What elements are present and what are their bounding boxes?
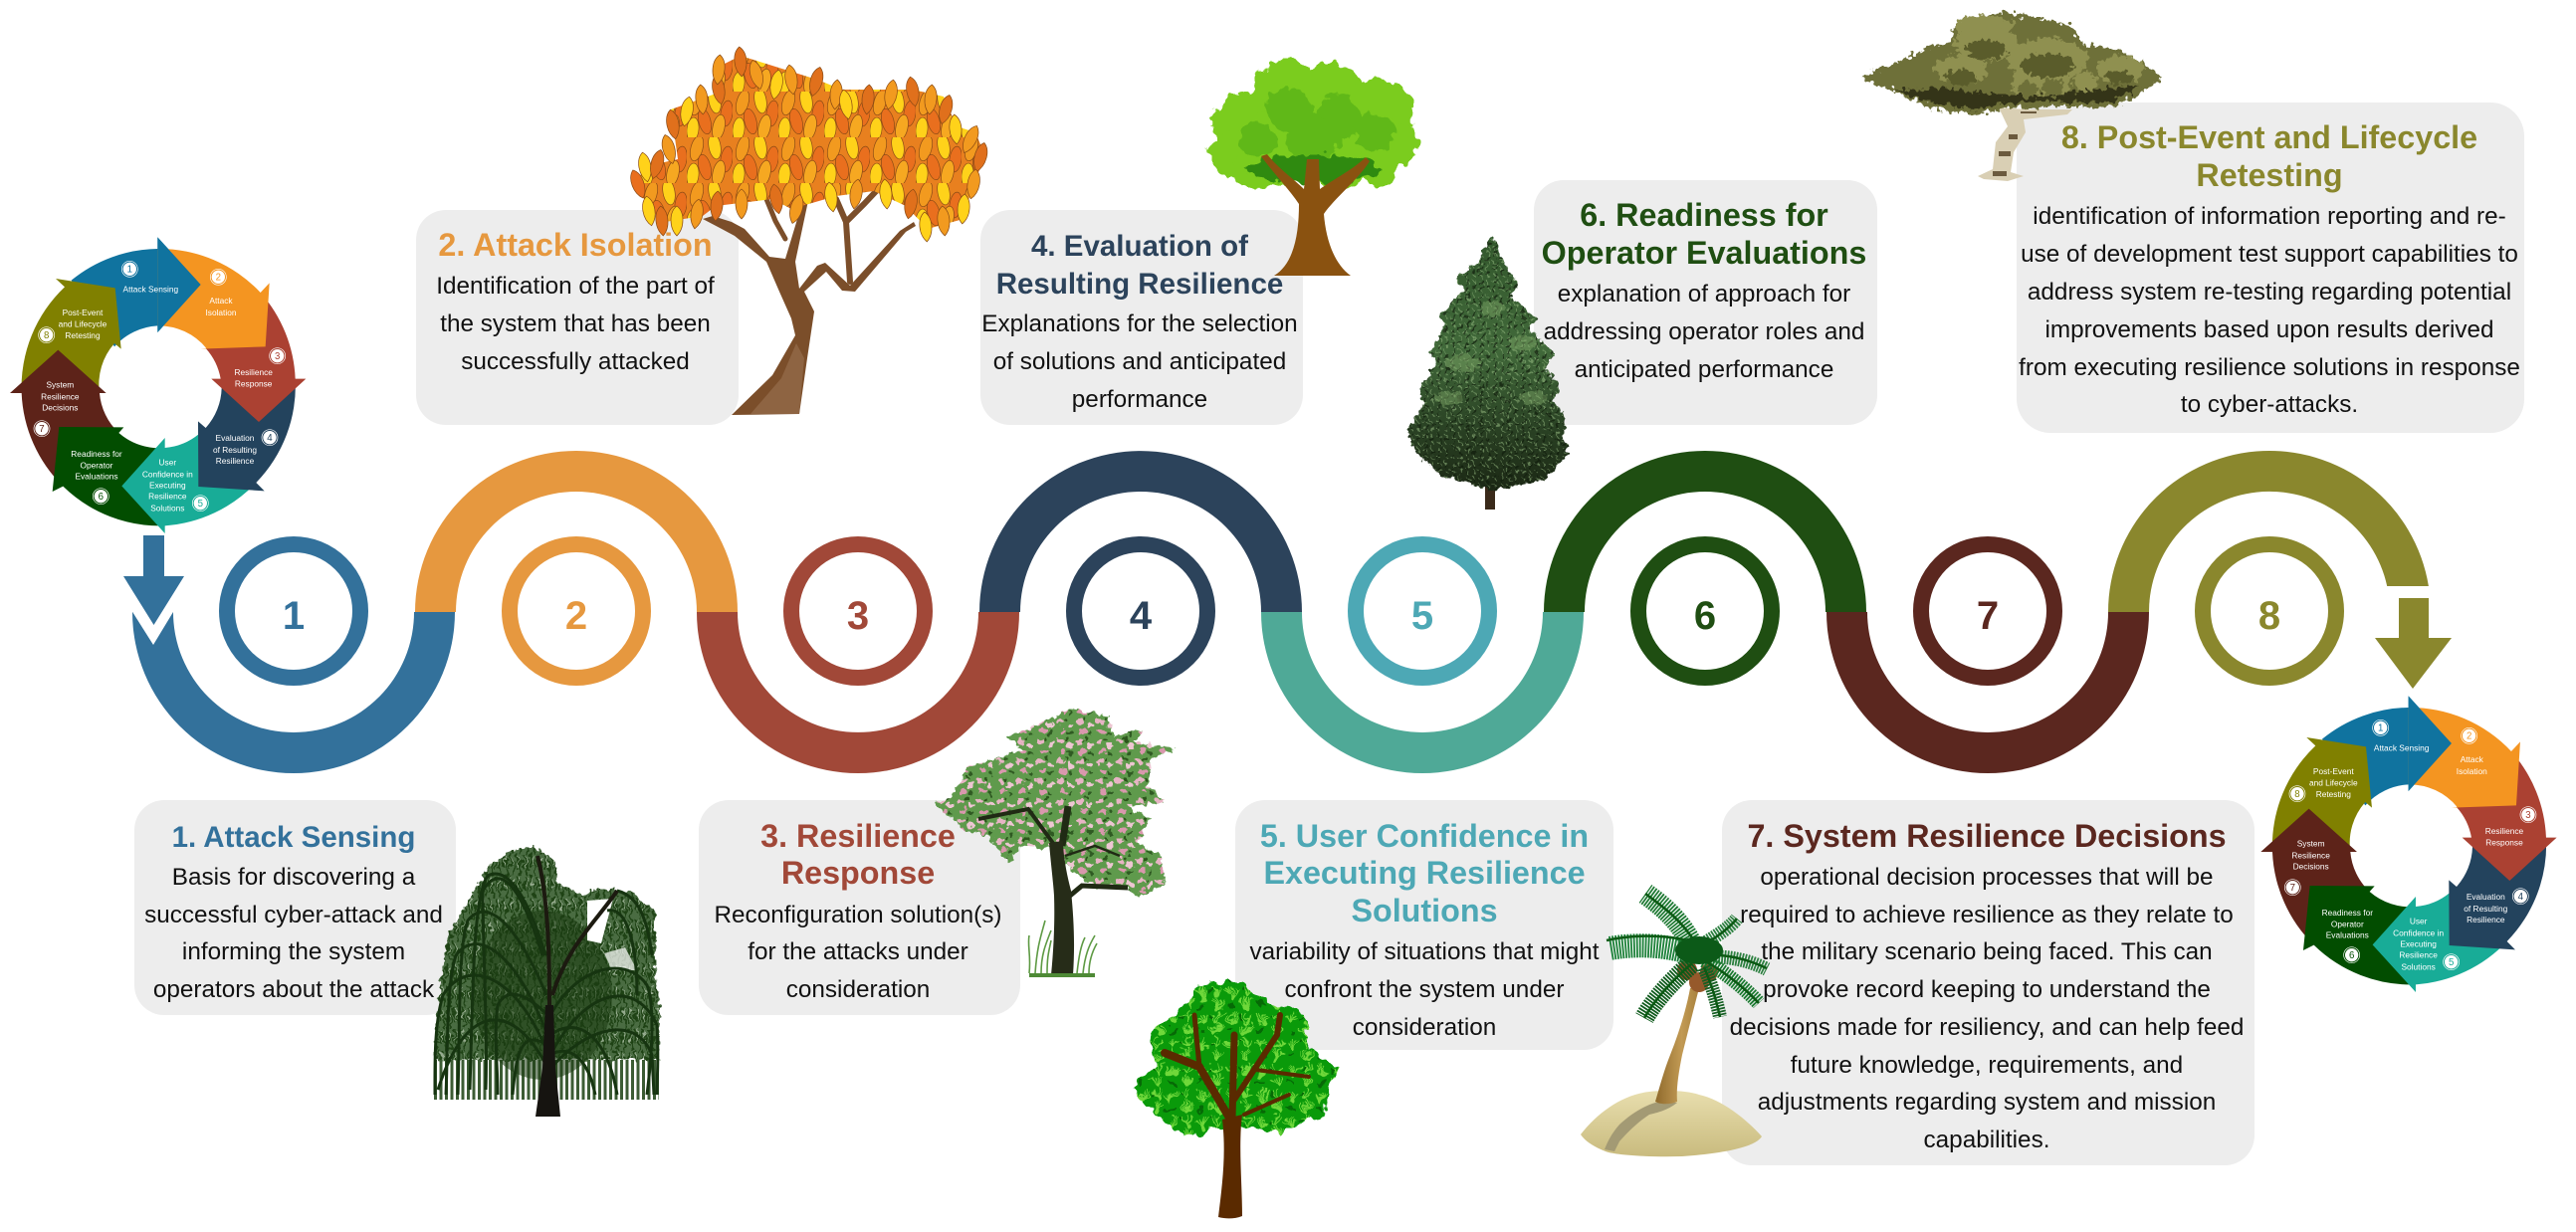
- arrow: entry into timeline: [123, 535, 184, 625]
- cycle labels: Decisions: [42, 402, 78, 412]
- text: system decisions description: capabilities.: [1924, 1127, 2049, 1153]
- icon: cherry blossom tree: [934, 709, 1177, 975]
- cycle labels: Isolation: [205, 308, 237, 317]
- text: system decisions description: adjustments regarding system and mission: [1758, 1089, 2216, 1116]
- cycle labels: Resilience: [148, 492, 187, 502]
- cycle labels: Confidence in: [2393, 927, 2444, 937]
- icon: acacia tree: [1861, 12, 2162, 181]
- cycle number badges: 4: [267, 433, 273, 444]
- panel: 1. Attack Sensing: [134, 800, 456, 1015]
- text: resilience response description: consideration: [786, 976, 930, 1003]
- cycle labels: Retesting: [65, 330, 101, 340]
- text: attack sensing description: operators about the attack: [153, 976, 435, 1003]
- step marker 8: 8: [2258, 594, 2280, 638]
- serpentine timeline band: [129, 451, 2429, 773]
- cycle labels: Attack Sensing: [123, 284, 178, 294]
- text: attack sensing description: successful cyber-attack and: [144, 902, 443, 928]
- cycle labels: Isolation: [2457, 766, 2487, 776]
- heading: 4. Evaluation of Resulting Resilience: Resulting Resilience: [996, 268, 1283, 301]
- heading: 7. System Resilience Decisions: 7. System Resilience Decisions: [1747, 818, 2227, 854]
- text: retesting description: improvements based upon results derived: [2044, 316, 2494, 343]
- cycle labels: Response: [2485, 838, 2523, 848]
- text: retesting description: [2019, 203, 2520, 418]
- heading: 4. Evaluation of Resulting Resilience: [996, 230, 1283, 301]
- icon: pine tree: [1407, 236, 1570, 510]
- panel: 6. Readiness for Operator Evaluations: [1534, 180, 1877, 425]
- cycle number badges: 7: [39, 424, 45, 435]
- step marker 5: 5: [1411, 594, 1433, 638]
- cycle number badges: 7: [2290, 883, 2295, 894]
- text: system decisions description: operational decision processes that will be: [1760, 864, 2214, 891]
- heading: 5. User Confidence in Executing Resilience Solutions: Solutions: [1351, 893, 1498, 928]
- cycle labels: Attack Sensing: [2374, 742, 2430, 752]
- step marker 2: [510, 544, 643, 678]
- cycle number badges: 5: [198, 499, 203, 510]
- text: resilience response description: for the attacks under: [748, 938, 968, 965]
- cycle diagram: bottom right: [2260, 696, 2557, 992]
- text: system decisions description: future knowledge, requirements, and: [1791, 1052, 2183, 1079]
- cycle labels: Operator: [81, 461, 113, 471]
- cycle labels: Attack: [2461, 754, 2484, 764]
- panel: 2. Attack Isolation: [416, 210, 739, 425]
- panel: 8. Post-Event and Lifecycle Retesting: [2017, 103, 2524, 433]
- cycle number badges: [2284, 719, 2536, 970]
- panel: 5. User Confidence: [1235, 800, 1613, 1050]
- cycle labels: Decisions: [2293, 861, 2329, 871]
- text: attack sensing description: [144, 864, 443, 1003]
- text: evaluation description: performance: [1072, 386, 1207, 413]
- text: system decisions description: provoke record keeping to understand the: [1763, 976, 2211, 1003]
- text: user confidence description: variability of situations that might: [1249, 938, 1600, 965]
- heading: 4. Evaluation of Resulting Resilience: 4. Evaluation of: [1031, 230, 1248, 263]
- cycle labels: Operator: [2331, 920, 2364, 929]
- heading: 8. Post-Event and Lifecycle Retesting: [2061, 119, 2477, 193]
- text: operator evaluations description: addressing operator roles and: [1544, 318, 1864, 345]
- panel: 7. System Resilience Decisions: [1722, 800, 2254, 1165]
- text: user confidence description: confront the system under: [1285, 976, 1564, 1003]
- cycle labels: Solutions: [150, 503, 184, 513]
- icon: willow tree: [434, 846, 660, 1117]
- text: system decisions description: decisions made for resiliency, and can help feed: [1730, 1014, 2244, 1041]
- heading: 5. User Confidence in Executing Resilience Solutions: Executing Resilience: [1263, 855, 1586, 891]
- cycle labels: System: [2297, 838, 2325, 848]
- cycle number badges: 4: [2518, 892, 2524, 903]
- cycle labels: User: [2410, 916, 2428, 925]
- heading: 2. Attack Isolation: 2. Attack Isolation: [438, 227, 713, 263]
- text: evaluation description: Explanations for the selection: [981, 310, 1298, 337]
- cycle labels: Response: [235, 379, 273, 389]
- text: system decisions description: required to achieve resilience as they relate to: [1740, 902, 2234, 928]
- heading: 3. Resilience Response: [760, 818, 956, 891]
- cycle labels: Resilience: [216, 456, 255, 466]
- text: evaluation description: [981, 310, 1298, 413]
- cycle labels: Attack: [209, 296, 233, 306]
- cycle number badges: 3: [275, 351, 280, 362]
- step marker 4: [1074, 544, 1207, 678]
- icon: green tree: [1130, 978, 1338, 1218]
- step marker 4: 4: [1130, 594, 1153, 638]
- cycle labels: Evaluation: [216, 433, 255, 443]
- text: retesting description: address system re-testing regarding potential: [2028, 279, 2511, 306]
- text: attack isolation description: successfully attacked: [461, 348, 690, 375]
- cycle labels: Resilience: [2485, 826, 2524, 836]
- step marker 8: [2203, 544, 2336, 678]
- cycle labels: Evaluations: [75, 472, 118, 482]
- cycle labels: Evaluation: [2467, 892, 2505, 902]
- step marker 2: 2: [565, 594, 587, 638]
- text: resilience response description: Reconfiguration solution(s): [714, 902, 1002, 928]
- cycle labels: of Resulting: [2464, 904, 2508, 914]
- text: resilience response description: [714, 902, 1002, 1003]
- text: operator evaluations description: anticipated performance: [1575, 356, 1833, 383]
- cycle labels: Resilience: [234, 367, 273, 377]
- arrow: exit from timeline: [2375, 598, 2452, 689]
- heading: 6. Readiness for Operator Evaluations: Operator Evaluations: [1542, 235, 1866, 271]
- text: system decisions description: [1730, 864, 2244, 1153]
- cycle labels: Evaluations: [2326, 930, 2369, 940]
- step marker 3: [791, 544, 925, 678]
- cycle labels: System: [46, 379, 74, 389]
- panel: 3. Resilience Response: [699, 800, 1020, 1015]
- cycle labels: Retesting: [2316, 789, 2351, 799]
- text: system decisions description: the military scenario being faced. This can: [1761, 938, 2213, 965]
- cycle labels: Resilience: [2467, 915, 2505, 924]
- step marker 6: 6: [1694, 594, 1716, 638]
- cycle number badges: 1: [2378, 723, 2383, 734]
- heading: 8. Post-Event and Lifecycle Retesting: Retesting: [2196, 157, 2343, 193]
- heading: 6. Readiness for Operator Evaluations: 6. Readiness for: [1580, 197, 1828, 233]
- cycle number badges: 1: [127, 265, 132, 276]
- cycle diagram: top left: [10, 237, 306, 533]
- text: retesting description: use of development test support capabilities to: [2021, 241, 2518, 268]
- cycle labels: and Lifecycle: [59, 319, 107, 329]
- cycle labels: Solutions: [2401, 961, 2436, 971]
- cycle labels: User: [159, 457, 176, 467]
- cycle labels: Readiness for: [71, 449, 122, 459]
- cycle number badges: 8: [44, 330, 49, 341]
- text: attack isolation description: the system that has been: [440, 310, 711, 337]
- cycle labels: Resilience: [2399, 950, 2438, 960]
- text: attack sensing description: Basis for discovering a: [172, 864, 416, 891]
- cycle labels: of Resulting: [213, 445, 257, 455]
- cycle labels: Resilience: [41, 391, 80, 401]
- panel: 4. Evaluation of Resulting Resilience: [980, 210, 1303, 425]
- cycle number badges: 6: [99, 492, 104, 503]
- cycle labels: Executing: [2400, 939, 2437, 949]
- cycle labels: Executing: [149, 481, 186, 491]
- text: retesting description: to cyber-attacks.: [2181, 391, 2358, 418]
- cycle labels: Resilience: [2291, 850, 2330, 860]
- text: attack sensing description: informing the system: [182, 938, 405, 965]
- cycle labels: [2291, 742, 2524, 971]
- cycle labels: [41, 284, 273, 513]
- cycle labels: and Lifecycle: [2309, 778, 2358, 788]
- heading: 8. Post-Event and Lifecycle Retesting: 8. Post-Event and Lifecycle: [2061, 119, 2477, 155]
- cycle labels: Readiness for: [2322, 908, 2373, 918]
- heading: 1. Attack Sensing: 1. Attack Sensing: [172, 821, 415, 854]
- step marker 6: [1638, 544, 1772, 678]
- heading: 3. Resilience Response: Response: [781, 855, 935, 891]
- heading: 5. User Confidence in Executing Resilience Solutions: [1260, 818, 1589, 928]
- cycle labels: Confidence in: [142, 469, 193, 479]
- text: attack isolation description: Identification of the part of: [436, 273, 715, 300]
- cycle number badges: 2: [216, 273, 221, 284]
- text: retesting description: identification of information reporting and re-: [2033, 203, 2506, 230]
- step marker 7: 7: [1977, 594, 1999, 638]
- step marker 3: 3: [847, 594, 869, 638]
- icon: autumn tree: [627, 47, 990, 415]
- step marker 1: [227, 544, 360, 678]
- text: user confidence description: [1249, 938, 1600, 1041]
- cycle number badges: [34, 261, 286, 512]
- heading: 3. Resilience Response: 3. Resilience: [760, 818, 956, 854]
- cycle labels: Post-Event: [63, 308, 104, 317]
- text: user confidence description: consideration: [1353, 1014, 1496, 1041]
- step marker 7: [1921, 544, 2054, 678]
- text: operator evaluations description: [1544, 281, 1864, 383]
- cycle number badges: 8: [2294, 789, 2300, 800]
- text: attack isolation description: [436, 273, 715, 375]
- step marker 1: 1: [283, 594, 305, 638]
- text: operator evaluations description: explanation of approach for: [1558, 281, 1850, 308]
- cycle labels: Post-Event: [2313, 766, 2354, 776]
- icon: palm tree on sand island: [1581, 894, 1767, 1156]
- step marker 5: [1356, 544, 1489, 678]
- text: retesting description: from executing resilience solutions in response: [2019, 354, 2520, 381]
- text: evaluation description: of solutions and anticipated: [993, 348, 1286, 375]
- heading: 5. User Confidence in Executing Resilience Solutions: 5. User Confidence in: [1260, 818, 1589, 854]
- cycle number badges: 3: [2525, 810, 2531, 821]
- cycle number badges: 5: [2449, 957, 2454, 968]
- cycle number badges: 6: [2349, 950, 2354, 961]
- heading: 6. Readiness for Operator Evaluations: [1542, 197, 1866, 271]
- cycle number badges: 2: [2467, 731, 2471, 742]
- icon: bright green tree: [1208, 61, 1417, 276]
